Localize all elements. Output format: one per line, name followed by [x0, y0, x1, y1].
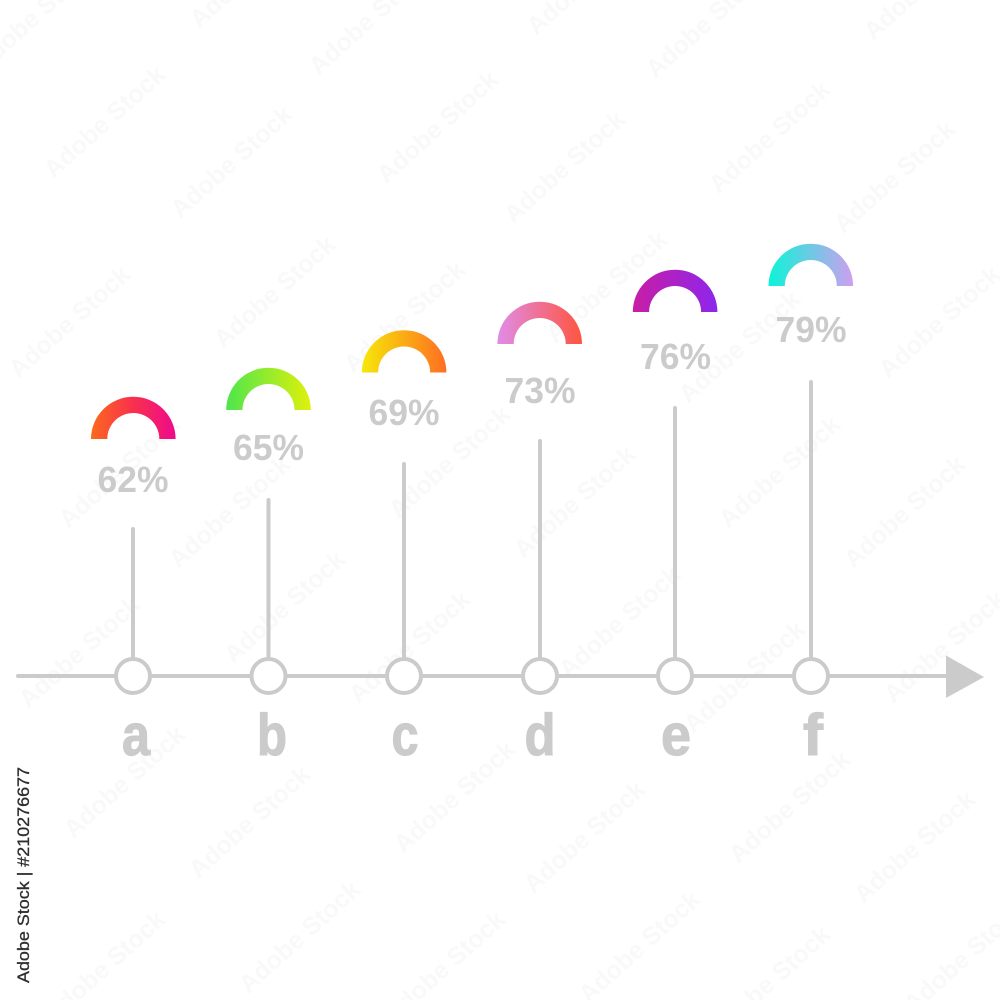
watermark pattern: Adobe Stock: [384, 400, 516, 524]
stem e: [673, 408, 677, 660]
watermark pattern: Adobe Stock: [674, 285, 806, 409]
value d: 73%: [504, 370, 576, 411]
label e: e: [661, 703, 691, 768]
watermark pattern: Adobe Stock: [344, 585, 476, 709]
watermark pattern: Adobe Stock: [839, 450, 971, 574]
node b: [252, 659, 286, 693]
watermark pattern: Adobe Stock: [184, 760, 316, 884]
stem c: [402, 464, 406, 660]
watermark pattern: Adobe Stock: [4, 260, 136, 384]
watermark pattern: Adobe Stock: [509, 440, 641, 564]
watermark pattern: Adobe Stock: [14, 590, 146, 714]
stock id side text: Adobe Stock | #210276677: [15, 767, 33, 983]
label f: f: [803, 703, 824, 768]
arc b: [226, 368, 311, 410]
value b: 65%: [233, 427, 304, 468]
label b: b: [257, 703, 287, 768]
value c: 69%: [368, 392, 440, 433]
arc d: [497, 302, 582, 344]
arc f: [768, 244, 853, 286]
item d: [497, 302, 582, 768]
watermark pattern: Adobe Stock: [59, 720, 191, 844]
watermark pattern: Adobe Stock: [234, 875, 366, 999]
node f: [794, 659, 828, 693]
label d: d: [524, 703, 556, 768]
arrowhead: [946, 656, 984, 698]
stem d: [538, 441, 542, 660]
value e: 76%: [640, 336, 711, 377]
value a: 62%: [98, 459, 168, 500]
arc e: [633, 270, 717, 312]
stem b: [266, 500, 270, 660]
watermark pattern: Adobe Stock: [54, 410, 186, 534]
item a: [91, 397, 176, 768]
watermark pattern: Adobe Stock: [164, 450, 296, 574]
value f: 79%: [776, 309, 846, 350]
watermark pattern: Adobe Stock: [39, 60, 171, 184]
watermark pattern: Adobe Stock: [829, 115, 961, 239]
watermark pattern: Adobe Stock: [166, 100, 298, 224]
stem f: [809, 382, 813, 660]
watermark pattern: Adobe Stock: [554, 560, 686, 684]
item c: [362, 330, 446, 768]
arc a: [91, 397, 176, 439]
watermark pattern: Adobe Stock: [389, 735, 521, 859]
item e: [633, 270, 717, 768]
stem a: [131, 529, 135, 660]
watermark pattern: Adobe Stock: [519, 775, 651, 899]
node c: [387, 659, 421, 693]
watermark pattern: Adobe Stock: [679, 615, 811, 739]
watermark pattern: Adobe Stock: [704, 75, 836, 199]
watermark pattern: Adobe Stock: [499, 105, 631, 229]
timeline axis with arrow: [18, 656, 984, 698]
item f: [768, 244, 853, 768]
label c: c: [392, 703, 418, 768]
node a: [116, 659, 150, 693]
node d: [523, 659, 557, 693]
watermark pattern: Adobe Stock: [849, 785, 981, 909]
watermark pattern: Adobe Stock: [372, 65, 504, 189]
watermark pattern: Adobe Stock: [219, 545, 351, 669]
watermark pattern: Adobe Stock: [724, 745, 856, 869]
watermark pattern: Adobe Stock: [541, 225, 673, 349]
node e: [658, 659, 692, 693]
label a: a: [122, 703, 151, 768]
item b: [226, 368, 311, 768]
watermark pattern: Adobe Stock: [714, 410, 846, 534]
watermark pattern: Adobe Stock: [209, 230, 341, 354]
watermark pattern: Adobe Stock: [339, 255, 471, 379]
arc c: [362, 330, 446, 372]
